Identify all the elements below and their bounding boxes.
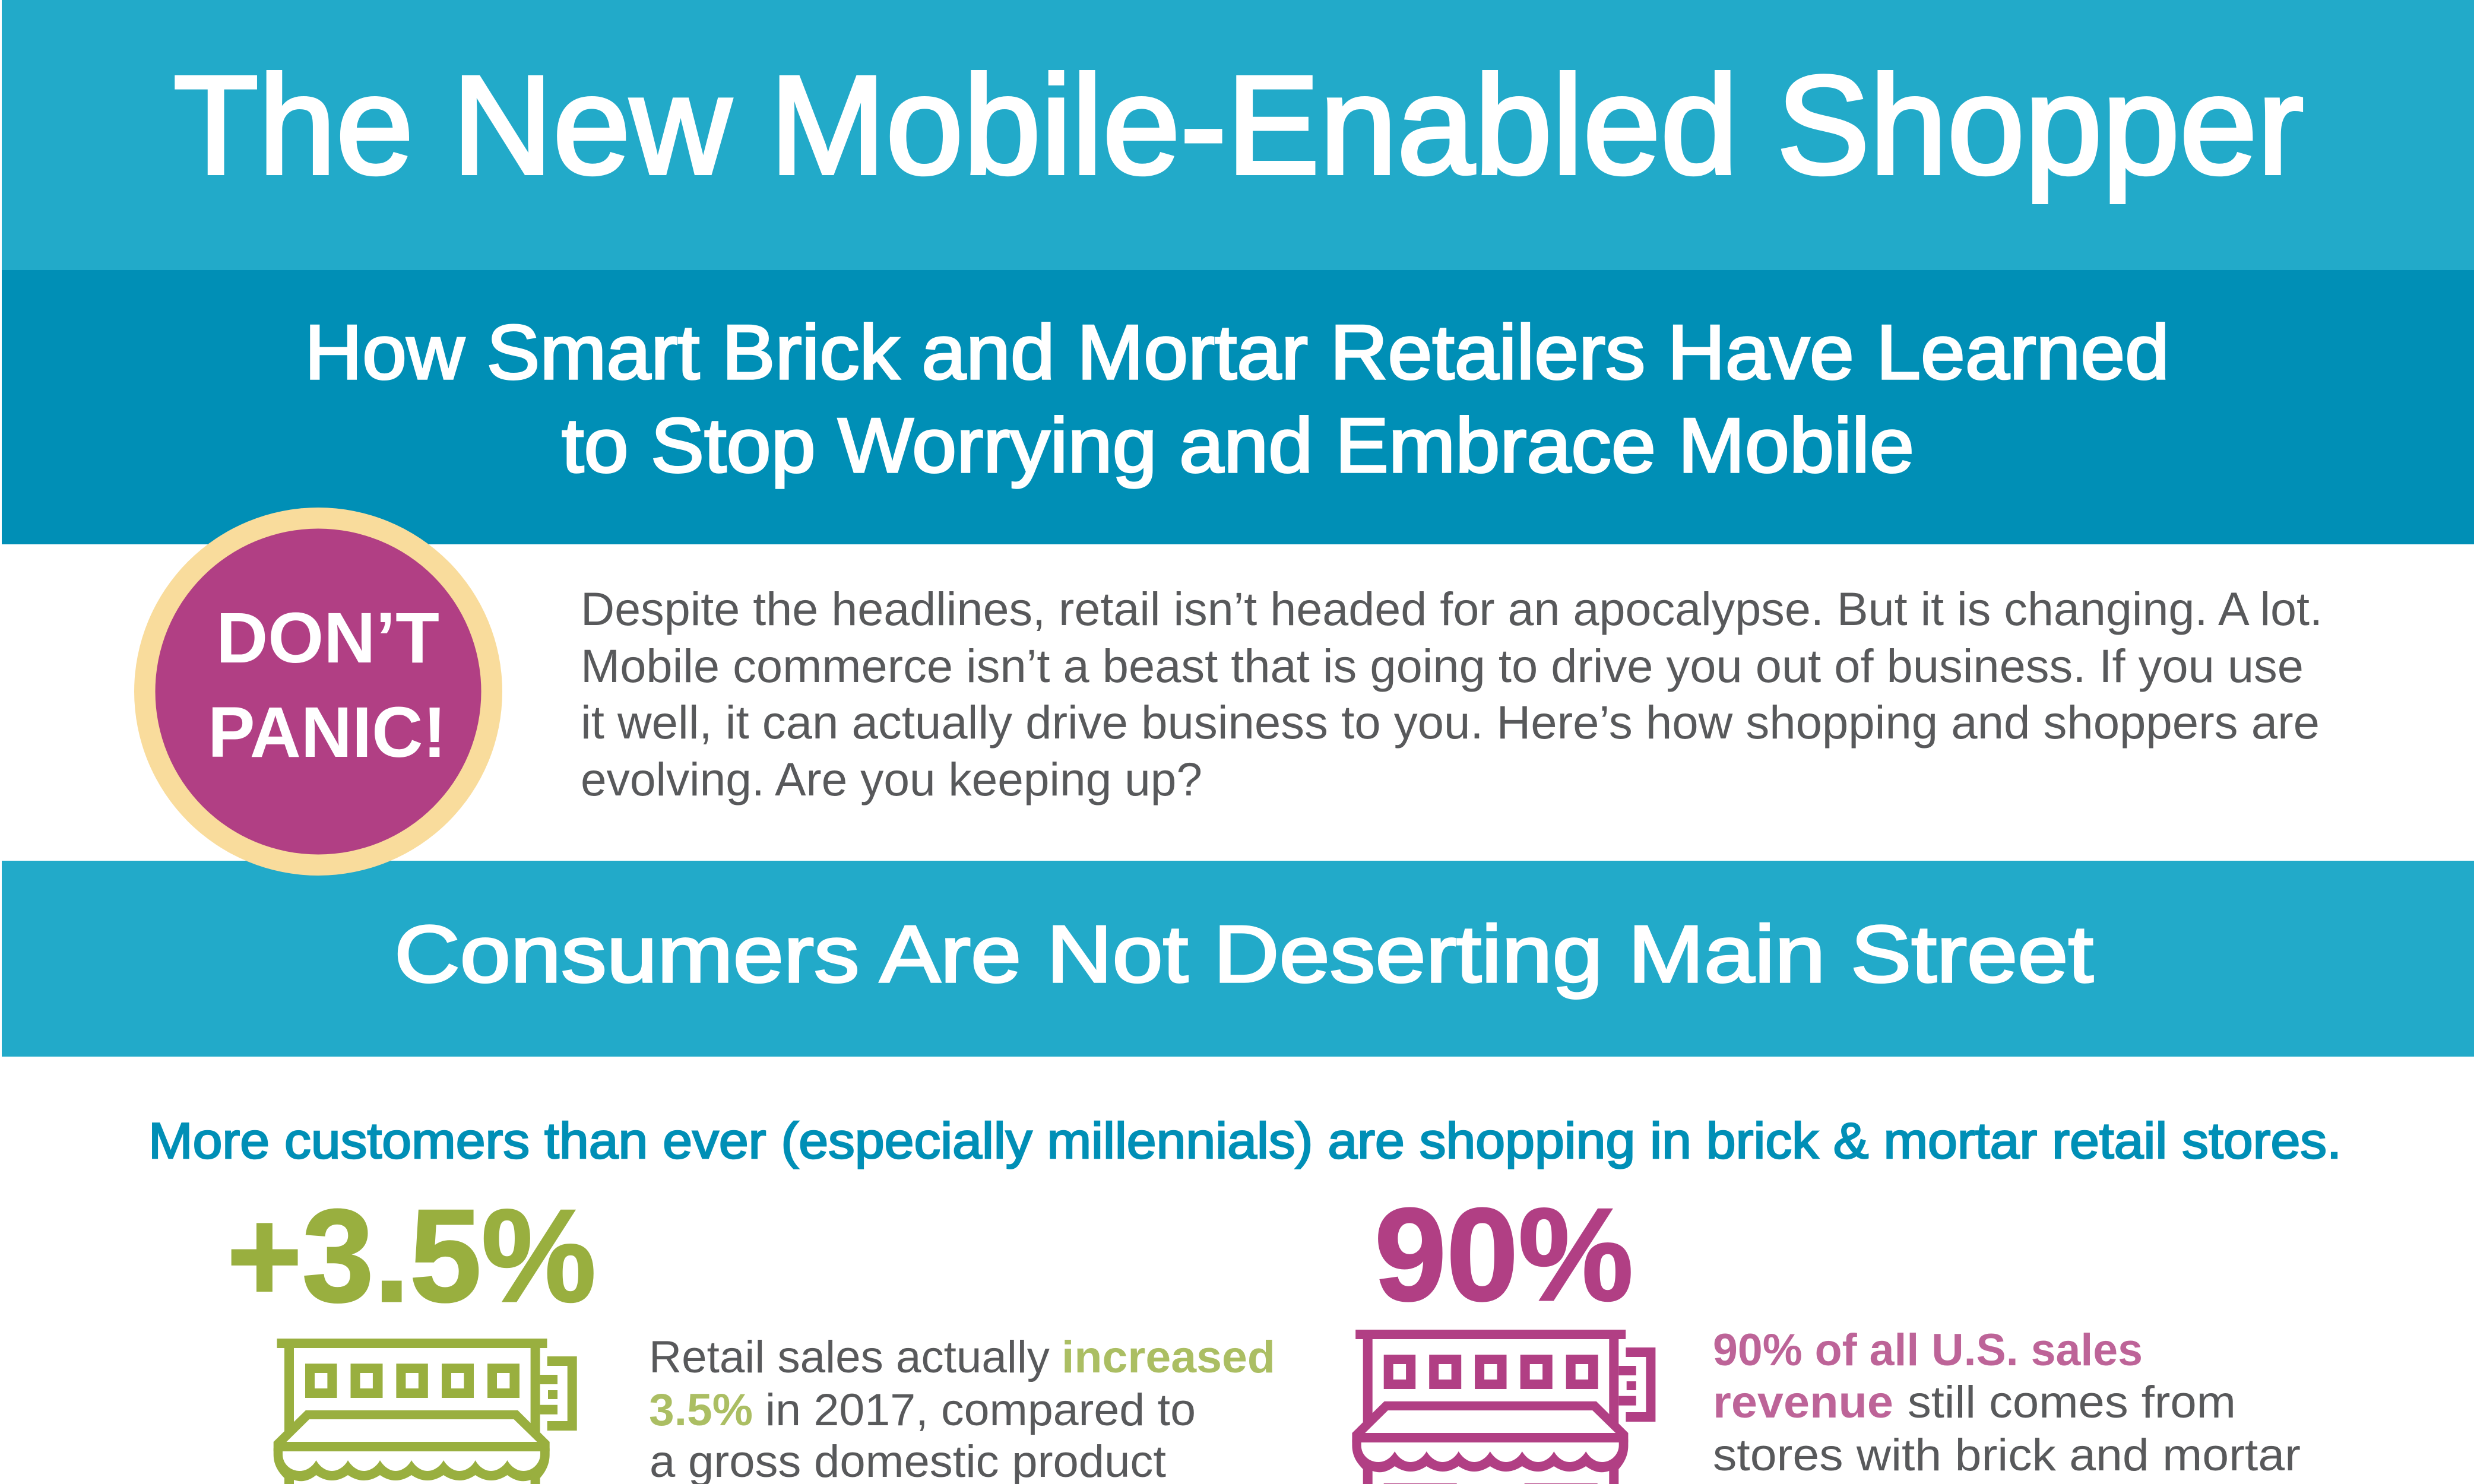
text: retail sales increase [649, 1332, 1275, 1484]
text: retail sales increase: 3.5% [649, 1385, 753, 1435]
text: retail sales increase: Retail sales actually [649, 1332, 1050, 1382]
section banner: consumers [2, 861, 2474, 1057]
subtitle line 1: How Smart Brick and Mortar Retailers Have Learned [305, 309, 2169, 395]
title: The New Mobile-Enabled Shopper [173, 47, 2304, 204]
icon: green storefront [274, 1339, 577, 1484]
title banner [2, 0, 2474, 270]
text: 90% of revenue: still comes from [1908, 1377, 2236, 1428]
intro paragraph: Mobile commerce isn’t a beast that is going to drive you out of business. If you use [581, 639, 2304, 692]
stat: +3.5%: +3.5% [227, 1182, 596, 1330]
intro paragraph: Despite the headlines, retail isn’t headed for an apocalypse. But it is changing. A lot. [581, 582, 2323, 635]
text: 90% of revenue [1713, 1325, 2301, 1480]
text: retail sales increase: in 2017, compared to [765, 1385, 1196, 1435]
section heading: Consumers Are Not Deserting Main Street [394, 909, 2093, 999]
icon: purple storefront [1352, 1330, 1655, 1484]
badge text line 2: PANIC! [208, 692, 446, 772]
section lead sentence: More customers than ever (especially millennials) are shopping in brick & mortar retail stores. [148, 1113, 2342, 1169]
subtitle banner [2, 270, 2474, 544]
badge: don't panic [134, 508, 502, 876]
intro paragraph: it well, it can actually drive business to you. Here’s how shopping and shoppers are [581, 696, 2320, 749]
stat: 90%: 90% [1374, 1181, 1633, 1328]
subtitle line 2: to Stop Worrying and Embrace Mobile [562, 402, 1914, 489]
badge text line 1: DON’T [216, 597, 439, 678]
text: 90% of revenue: stores with brick and mortar [1713, 1430, 2301, 1480]
text: 90% of revenue: 90% of all U.S. sales [1713, 1325, 2143, 1375]
intro paragraph: evolving. Are you keeping up? [581, 753, 1202, 806]
text: 90% of revenue: revenue [1713, 1377, 1893, 1428]
intro paragraph [581, 582, 2323, 806]
text: retail sales increase: increased [1062, 1332, 1275, 1382]
